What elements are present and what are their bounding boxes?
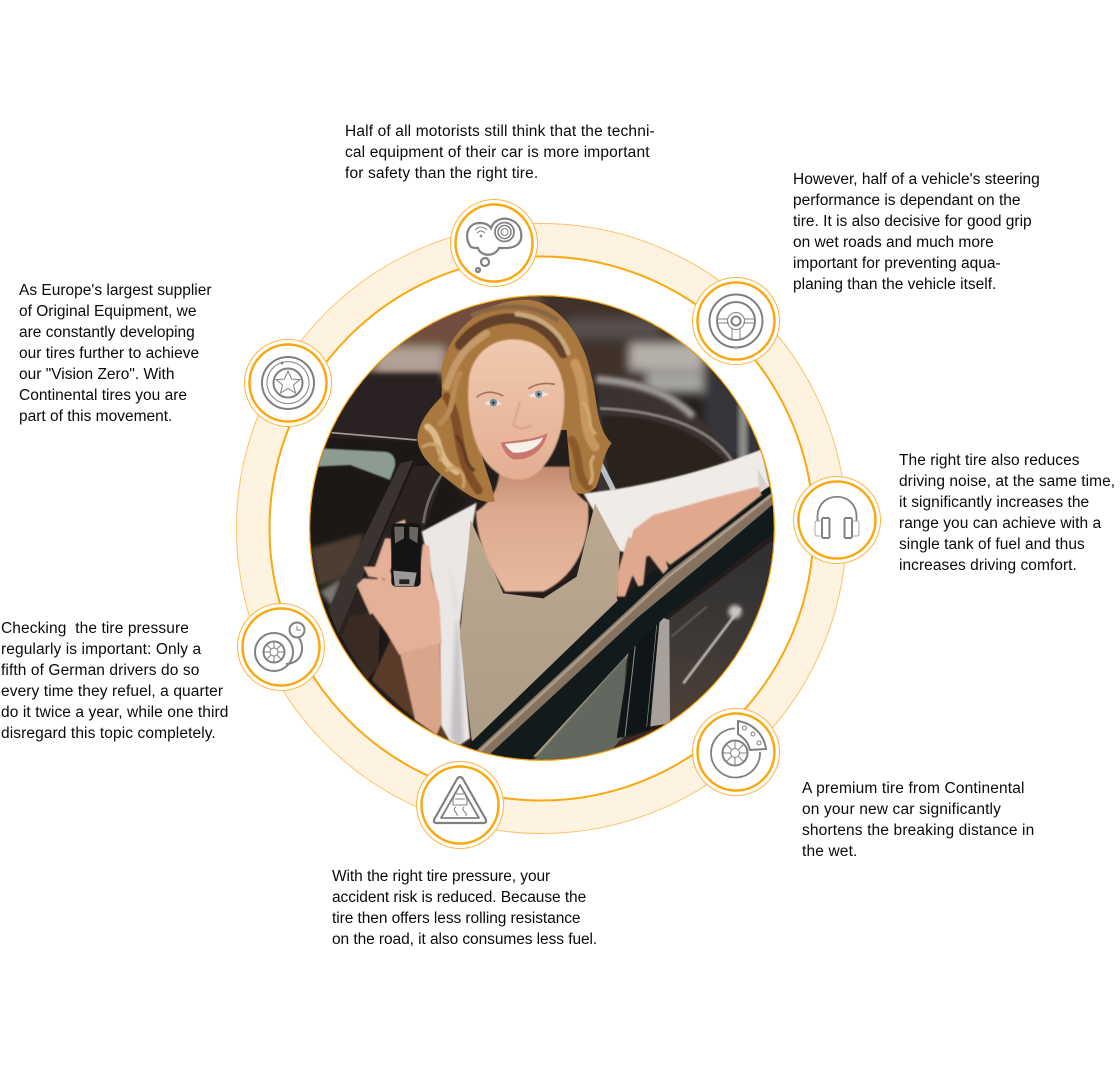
text: top right: performance is dependant on the — [793, 192, 1020, 209]
text: top right: planing than the vehicle itself. — [793, 276, 996, 293]
text: bottom right: shortens the breaking distance in — [802, 822, 1034, 839]
text: left upper: As Europe's largest supplier — [19, 282, 212, 299]
text: right: it significantly increases the — [899, 494, 1089, 511]
blurred showroom background — [364, 296, 763, 459]
text: bottom center: accident risk is reduced. Because the — [332, 889, 586, 906]
car, left — [329, 370, 442, 436]
text: right: increases driving comfort. — [899, 557, 1077, 574]
beige top — [460, 503, 628, 757]
text: left lower: regularly is important: Only a — [1, 641, 201, 658]
text: left lower: fifth of German drivers do so — [1, 662, 199, 679]
smile — [501, 433, 547, 459]
key fob — [391, 523, 421, 587]
text: left upper: are constantly developing — [19, 324, 195, 341]
text: left upper — [19, 282, 212, 425]
text: bottom right: the wet. — [802, 843, 857, 860]
text: top right: However, half of a vehicle's steering — [793, 171, 1040, 188]
door frame — [467, 487, 780, 770]
text: left upper: our tires further to achieve — [19, 345, 199, 362]
eyes and brows — [477, 384, 555, 428]
text: bottom center — [332, 868, 597, 948]
hair — [417, 300, 612, 502]
cardigan, left front — [422, 503, 477, 748]
text: top center: for safety than the right tire. — [345, 165, 538, 182]
text: bottom right: A premium tire from Continental — [802, 780, 1025, 797]
icon badge: steering wheel — [692, 278, 780, 364]
photo: woman holding car key — [300, 290, 780, 770]
text: left lower: do it twice a year, while one third — [1, 704, 229, 721]
text: bottom right — [802, 780, 1034, 860]
text: left upper: of Original Equipment, we — [19, 303, 196, 320]
text: right: range you can achieve with a — [899, 515, 1101, 532]
text: top right — [793, 171, 1040, 293]
text: bottom right: on your new car significantly — [802, 801, 1001, 818]
face — [468, 339, 564, 480]
car behind, right — [596, 384, 730, 492]
icon badge: star wheel — [244, 340, 332, 426]
text: bottom center: With the right tire pressure, your — [332, 868, 550, 885]
text: right — [899, 452, 1115, 574]
text: top center — [345, 123, 655, 182]
text: top right: important for preventing aqua- — [793, 255, 1001, 272]
text: top right: tire. It is also decisive for good grip — [793, 213, 1032, 230]
text: left lower — [1, 620, 229, 742]
icon badge: tire with pressure gauge — [238, 604, 324, 690]
icon badge: skid warning triangle — [416, 762, 504, 848]
left hand and forearm — [357, 519, 442, 735]
text: left upper: our "Vision Zero". With — [19, 366, 174, 383]
text: top center: cal equipment of their car is more important — [345, 144, 650, 161]
right hand on door — [617, 487, 762, 597]
orange ring — [236, 224, 846, 834]
text: right: driving noise, at the same time, — [899, 473, 1115, 490]
text: left lower: disregard this topic completely. — [1, 725, 216, 742]
icon badge: headphones — [794, 476, 880, 564]
neck and chest — [476, 467, 588, 592]
circular diagram — [236, 199, 881, 849]
icon badge: brake disc — [692, 708, 780, 796]
text: top right: on wet roads and much more — [793, 234, 994, 251]
text: top center: Half of all motorists still think that the techni- — [345, 123, 655, 140]
text: bottom center: tire then offers less rolling resistance — [332, 910, 580, 927]
text: left lower: Checking the tire pressure — [1, 620, 189, 637]
text: bottom center: on the road, it also consumes less fuel. — [332, 931, 597, 948]
text: left lower: every time they refuel, a quarter — [1, 683, 223, 700]
text: right: The right tire also reduces — [899, 452, 1080, 469]
text: left upper: Continental tires you are — [19, 387, 187, 404]
text: left upper: part of this movement. — [19, 408, 172, 425]
text: right: single tank of fuel and thus — [899, 536, 1085, 553]
door glass — [668, 540, 774, 722]
cardigan, right sleeve — [583, 449, 770, 553]
icon badge: thought bubble — [450, 200, 538, 286]
